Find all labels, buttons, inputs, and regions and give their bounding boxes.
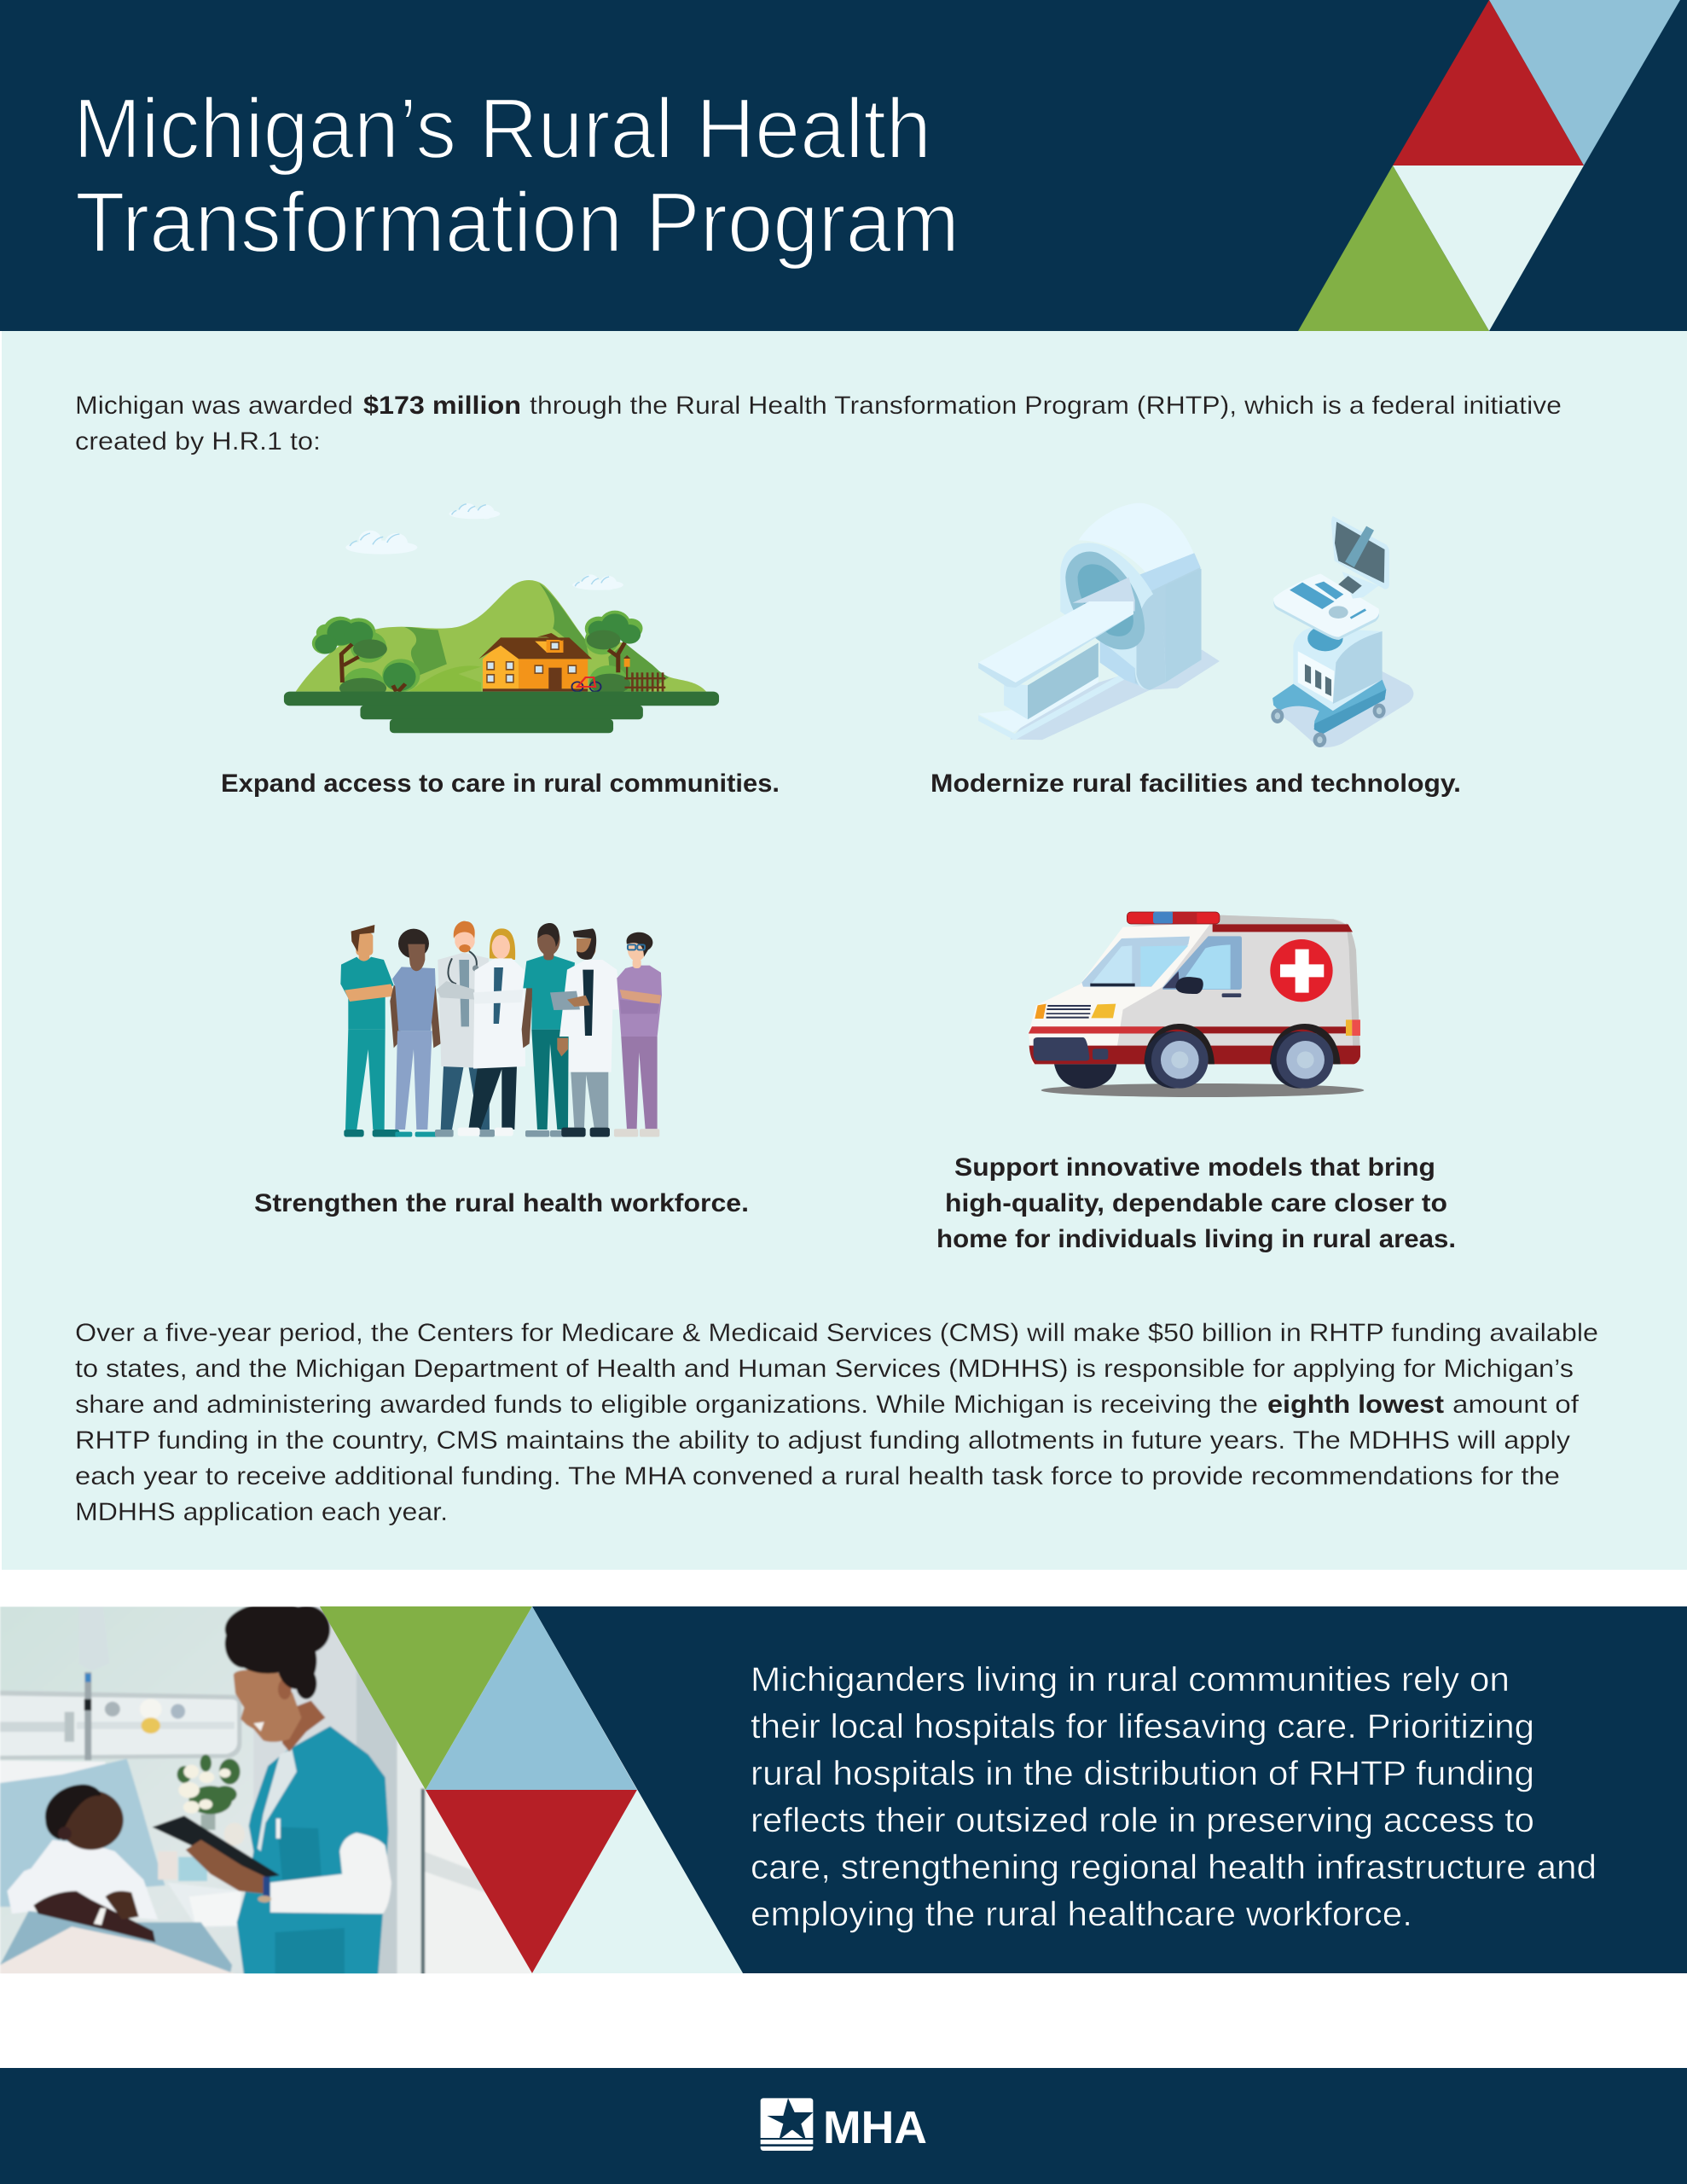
funding paragraph: MDHHS application each year. (75, 1498, 448, 1526)
panel: program overview (2, 331, 1687, 1570)
caption: strengthen workforce: Strengthen the rural health workforce. (254, 1189, 749, 1217)
person: doctor with stethoscope (435, 921, 495, 1137)
funding paragraph: each year to receive additional funding. The MHA convened a rural health task force to provide recommendations for the (75, 1462, 1560, 1490)
banner statement: care, strengthening regional health infrastructure and (751, 1849, 1597, 1886)
funding paragraph (75, 1319, 1598, 1526)
title (73, 81, 959, 270)
funding paragraph: RHTP funding in the country, CMS maintains the ability to adjust funding allotments in future years. The MDHHS will apply (75, 1426, 1570, 1455)
banner statement: Michiganders living in rural communities rely on (751, 1661, 1510, 1699)
caption: support innovative models (936, 1153, 1456, 1253)
caption: support innovative models: home for individuals living in rural areas. (936, 1225, 1456, 1253)
caption: support innovative models: Support innovative models that bring (954, 1153, 1435, 1182)
intro text: $173 million (363, 392, 521, 420)
banner triangles (320, 1606, 743, 1973)
intro text (75, 392, 1562, 456)
title: Transformation Program (75, 175, 959, 270)
funding paragraph: to states, and the Michigan Department of Health and Human Services (MDHHS) is responsible for applying for Michigan’s (75, 1355, 1574, 1383)
banner statement (751, 1661, 1597, 1933)
wordmark: MHA (823, 2102, 927, 2153)
icon: MRI scanner and ultrasound (978, 503, 1413, 747)
header triangles (1298, 0, 1680, 331)
title: Michigan’s Rural Health (73, 81, 931, 177)
intro text: created by H.R.1 to: (75, 427, 321, 456)
panel: header band (0, 0, 1687, 331)
banner statement: employing the rural healthcare workforce. (751, 1896, 1412, 1933)
logo: MHA (759, 2098, 927, 2153)
caption: expand access: Expand access to care in rural communities. (221, 770, 780, 798)
photo: nurse with child patient (0, 1602, 543, 1977)
banner statement: rural hospitals in the distribution of RHTP funding (751, 1755, 1534, 1792)
panel: rural hospitals banner (0, 1602, 1687, 1977)
person: bearded doctor with tablet (550, 928, 621, 1137)
icon: healthcare workforce group (340, 921, 662, 1137)
icon: star mark (759, 2098, 815, 2151)
person: teal scrubs man (340, 925, 399, 1137)
caption: support innovative models: high-quality, dependable care closer to (945, 1189, 1447, 1217)
funding paragraph: amount of (1452, 1391, 1580, 1419)
icon: rural landscape (284, 503, 719, 733)
funding paragraph: share and administering awarded funds to eligible organizations. While Michigan is receiving the (75, 1391, 1258, 1419)
person: teal scrubs man two (522, 923, 575, 1137)
caption: modernize facilities: Modernize rural facilities and technology. (930, 770, 1461, 798)
intro text: through the Rural Health Transformation Program (RHTP), which is a federal initiative (530, 392, 1562, 420)
icon: ambulance (1029, 912, 1364, 1097)
banner navy field (532, 1606, 1687, 1973)
banner statement: reflects their outsized role in preserving access to (751, 1802, 1534, 1839)
intro text: Michigan was awarded (75, 392, 353, 420)
person: blue scrubs woman (390, 929, 441, 1137)
person: purple scrubs woman (614, 932, 662, 1137)
funding paragraph: Over a five-year period, the Centers for Medicare & Medicaid Services (CMS) will make $50 billion in RHTP funding available (75, 1319, 1598, 1347)
funding paragraph: eighth lowest (1267, 1391, 1444, 1419)
banner statement: their local hospitals for lifesaving care. Prioritizing (751, 1708, 1534, 1745)
person: doctor with blonde hair (458, 928, 525, 1136)
panel: footer (0, 2068, 1687, 2184)
